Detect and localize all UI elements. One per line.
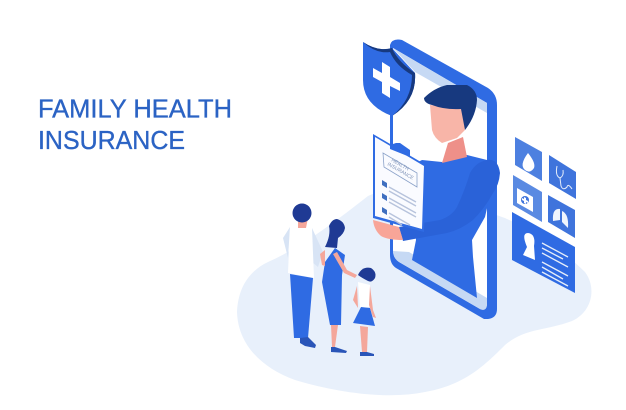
heading: family health insurance: INSURANCE bbox=[38, 125, 185, 155]
heading: family health insurance: FAMILY HEALTH bbox=[38, 94, 232, 124]
shield icon bbox=[363, 42, 415, 144]
hand bbox=[373, 220, 403, 240]
doctor bbox=[373, 85, 500, 298]
arm bbox=[399, 160, 500, 241]
card: drop bbox=[515, 137, 542, 181]
icon cards bbox=[512, 137, 576, 293]
checklist bbox=[382, 180, 416, 225]
mother bbox=[320, 219, 357, 353]
daughter bbox=[353, 268, 376, 356]
form label bbox=[383, 153, 417, 187]
phone bbox=[390, 40, 497, 319]
neck bbox=[442, 137, 467, 163]
torso bbox=[412, 155, 490, 298]
father bbox=[283, 204, 323, 348]
clip bbox=[390, 143, 410, 157]
clipboard bbox=[373, 134, 426, 232]
heading: family health insurance bbox=[38, 94, 232, 155]
form label: INSURANCE bbox=[386, 162, 415, 182]
family bbox=[283, 204, 376, 356]
face bbox=[430, 105, 465, 143]
background blob bbox=[237, 191, 591, 395]
card: first aid kit bbox=[513, 175, 542, 222]
hair bbox=[424, 85, 477, 130]
card: lungs bbox=[548, 195, 575, 238]
card: profile bbox=[512, 212, 575, 293]
form label: HEALTH bbox=[390, 158, 410, 173]
card: stethoscope bbox=[549, 155, 576, 199]
